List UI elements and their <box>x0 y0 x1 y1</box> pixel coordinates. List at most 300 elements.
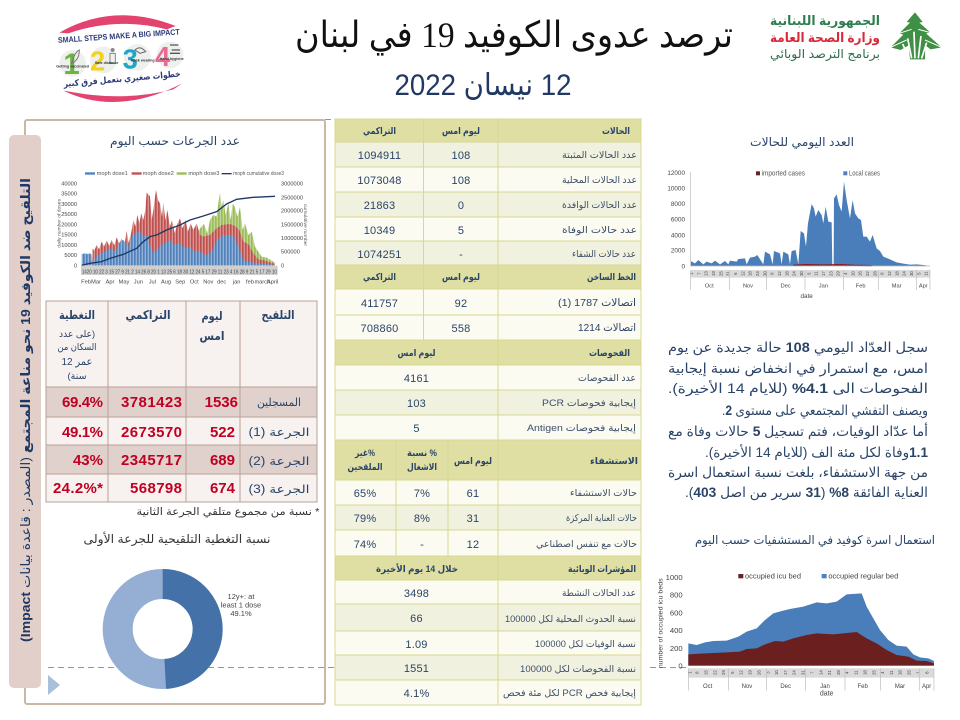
table header: سنة) <box>68 371 87 382</box>
title: ترصد عدوى الكوفيد 19 في لبنان <box>295 15 733 56</box>
table header <box>58 308 294 382</box>
heading: first dose coverage: نسبة التغطية التلقيحية للجرعة الأولى <box>84 531 270 547</box>
section: epidemiological indicators: نسبة الحدوث المحلية لكل 100000 <box>505 614 636 625</box>
text block: daily summary: سجل العدّاد اليومي 108 حالة جديدة عن يوم <box>668 340 928 356</box>
section: hotline <box>361 272 636 335</box>
table header: عمر 12 <box>62 356 92 368</box>
month labels: march <box>254 280 270 286</box>
date tick labels: 24 <box>792 670 797 675</box>
decorative triangle marker <box>48 675 60 695</box>
section: hospitalisation: 79% <box>354 513 376 525</box>
section: hospitalisation: الاشغال <box>407 462 437 473</box>
date tick labels: 24 <box>755 271 760 276</box>
section: cases: ليوم امس <box>442 126 480 137</box>
right axis labels: 3000000 <box>281 182 303 188</box>
ministry name text: الجمهورية اللبنانية <box>770 13 880 28</box>
date tick labels: 18 <box>862 670 867 675</box>
axis titles <box>57 198 308 248</box>
section: hospitalisation: ليوم امس <box>454 456 492 467</box>
section: hospitalisation: 74% <box>354 539 376 551</box>
section: hospitalisation <box>348 448 638 551</box>
row: dose 3: 674 <box>210 480 236 497</box>
month labels: Mar <box>892 284 902 290</box>
section: epidemiological indicators: نسبة الوفيات لكل 100000 <box>535 639 636 650</box>
legend: occupied regular bed <box>828 572 898 581</box>
dashed line inside panel <box>48 666 325 668</box>
date tick labels: 10 <box>774 670 779 675</box>
date tick labels: 5 <box>806 272 811 275</box>
month labels: Nov <box>743 284 753 290</box>
section: hospitalisation: 65% <box>354 488 376 500</box>
right axis labels: 0 <box>281 263 284 269</box>
section: cases: 108 <box>452 150 470 162</box>
date tick labels: 1420 10 22 3 15 27 9 21 2 14 26 8 20 1 13 25 6 18 30 12 24 5 17 29 11 23 4 16 28 9 21 5 17 29 10 <box>82 270 277 276</box>
chart legend: moph dose3 <box>188 171 219 177</box>
date tick labels: 11 <box>854 670 859 675</box>
section: tests: إيجابية فحوصات PCR <box>542 398 636 409</box>
date tick labels: 6 <box>733 272 738 275</box>
logo: small steps make a big impact: 2 <box>90 46 105 77</box>
date tick labels: 18 <box>898 670 903 675</box>
date tick labels: 12 <box>740 271 745 276</box>
section: hospitalisation: 31 <box>467 513 479 525</box>
axis titles: daily number of doses <box>57 198 63 248</box>
section: epidemiological indicators: المؤشرات الوبائية <box>568 564 636 575</box>
date band <box>81 266 278 275</box>
icu bed area <box>688 632 934 666</box>
text block: daily summary: الفحوصات الى 4.1% (للايام 14 الأخيرة). <box>668 380 928 397</box>
logo: small steps make a big impact: 1 <box>63 48 80 81</box>
month labels: Feb <box>857 684 868 690</box>
date tick labels: 15 <box>703 670 708 675</box>
chart: hospital beds <box>658 572 934 698</box>
logo: small steps make a big impact: 3 <box>123 43 138 74</box>
month labels <box>703 684 931 698</box>
date tick labels: 25 <box>871 670 876 675</box>
row: dose 3: 568798 <box>130 480 182 497</box>
month labels: jan <box>232 280 240 286</box>
section: hospitalisation: الاستشفاء <box>590 456 638 467</box>
date tick labels: 7 <box>809 671 814 674</box>
month labels: Aug <box>161 280 171 286</box>
date tick labels <box>689 271 929 276</box>
date tick labels: 19 <box>711 271 716 276</box>
row: registered: المسجلين <box>257 397 301 409</box>
date tick labels: 11 <box>814 271 819 276</box>
y axis title: number of occupied icu beds <box>658 578 665 668</box>
month labels: Apr <box>919 284 928 290</box>
legend: Local cases <box>849 170 880 177</box>
date tick labels: 4 <box>880 671 885 674</box>
section: cases: التراكمي <box>363 126 396 137</box>
date tick labels: 11 <box>889 670 894 675</box>
date tick labels: 31 <box>726 271 731 276</box>
donut chart: first dose coverage <box>118 569 261 689</box>
date tick labels: 6 <box>880 272 885 275</box>
date tick labels: 30 <box>762 271 767 276</box>
footnote: * نسبة من مجموع متلقي الجرعة الثانية <box>136 506 320 518</box>
text block: daily summary: أما عدّاد الوفيات، فتم تسجيل 5 حالات وفاة مع <box>668 422 928 440</box>
section: hotline: اتصالات 1787 (1) <box>558 297 636 309</box>
legend <box>756 170 880 177</box>
row: dose 2: 43% <box>73 452 103 469</box>
section: tests: 5 <box>413 423 420 435</box>
month labels: Jan <box>819 284 828 290</box>
y axis labels: 4000 <box>671 232 685 239</box>
month labels: Sep <box>175 280 185 286</box>
row: dose 1: 2673570 <box>121 424 182 441</box>
month labels: Nov <box>742 684 752 690</box>
month labels <box>81 280 278 286</box>
row: dose 3: الجرعة (3) <box>248 484 310 497</box>
text block: daily summary: 1.1وفاة لكل مئة الف (للايام 14 الأخيرة). <box>705 444 928 461</box>
text block: daily summary: من جهة الاستشفاء، بلغت نسبة استعمال اسرة <box>668 465 928 481</box>
table header: التراكمي <box>126 308 170 322</box>
row: dose 2 <box>73 452 310 469</box>
y axis labels: 0 <box>681 263 685 270</box>
right axis labels: 2500000 <box>281 195 303 201</box>
logo: small steps make a big impact <box>55 15 184 102</box>
date tick labels: 17 <box>821 271 826 276</box>
icon: cedar tree <box>891 12 942 59</box>
month labels: Dec <box>781 284 791 290</box>
date tick labels: 18 <box>894 271 899 276</box>
month labels: date <box>820 691 834 698</box>
logo: small steps make a big impact: Safe distance <box>95 61 118 65</box>
month labels: dec <box>217 280 226 286</box>
legend: imported cases <box>762 170 805 177</box>
dose 2 area <box>92 190 275 265</box>
imported cases area <box>793 263 872 268</box>
section: hospitalisation: - <box>420 539 424 551</box>
table: cases, tests, hospitalisation <box>335 119 641 705</box>
date tick labels: 1 <box>915 671 920 674</box>
date tick labels: 18 <box>784 271 789 276</box>
date tick labels: 30 <box>799 271 804 276</box>
date tick labels: 12 <box>777 271 782 276</box>
month labels: Apr <box>106 280 115 286</box>
section: hospitalisation: الملقحين <box>348 462 382 473</box>
row: dose 1: الجرعة (1) <box>248 427 310 440</box>
right axis labels: 2000000 <box>281 209 303 215</box>
axis baseline <box>691 172 930 266</box>
left axis labels: 15000 <box>61 233 77 239</box>
month labels: date <box>800 293 813 300</box>
date tick labels: 23 <box>828 271 833 276</box>
row: dose 1: 49.1% <box>62 424 103 441</box>
section: cases: 1073048 <box>357 175 402 187</box>
date tick labels: 7 <box>696 272 701 275</box>
y axis labels: 400 <box>670 626 683 635</box>
y axis labels: 12000 <box>667 170 685 177</box>
month labels: Jul <box>149 280 156 286</box>
date tick labels: 22 <box>712 670 717 675</box>
axis titles: cumulative number <box>302 204 308 246</box>
section: tests: عدد الفحوصات <box>578 373 636 384</box>
date tick labels: 29 <box>721 670 726 675</box>
month labels: Apr <box>922 684 931 690</box>
section: hospitalisation: 12 <box>467 539 479 551</box>
date tick labels: 12 <box>887 271 892 276</box>
table header: التغطية <box>59 308 95 322</box>
date tick labels: 18 <box>748 271 753 276</box>
local cases area <box>691 182 930 266</box>
row: dose 2: 689 <box>210 452 235 469</box>
section: epidemiological indicators: 1551 <box>404 663 429 675</box>
ministry name text <box>770 13 880 62</box>
section: hotline: 411757 <box>361 298 398 310</box>
legend: occupied icu bed <box>745 572 801 581</box>
section: hotline: الخط الساخن <box>587 272 636 283</box>
date tick labels: 24 <box>902 271 907 276</box>
section: cases: عدد الحالات الوافدة <box>562 200 637 211</box>
donut label: least 1 dose <box>221 600 261 610</box>
section: hotline: 708860 <box>361 323 398 335</box>
date tick labels: 28 <box>872 271 877 276</box>
date band <box>688 668 934 678</box>
regular bed area <box>688 593 934 666</box>
section: tests: ليوم امس <box>398 348 436 359</box>
date tick labels: 25 <box>907 670 912 675</box>
section: hospitalisation: حالات العناية المركزة <box>566 513 637 524</box>
month labels: Mar <box>895 684 905 690</box>
section: tests: 4161 <box>404 373 429 385</box>
chart: daily cases <box>667 170 930 300</box>
section: epidemiological indicators: 66 <box>410 613 423 625</box>
date tick labels: 5 <box>916 272 921 275</box>
heading: hospital bed use: استعمال اسرة كوفيد في المستشفيات حسب اليوم <box>695 533 935 548</box>
table header: السكان من <box>58 342 96 353</box>
table header: (على عدد <box>59 329 95 340</box>
logo: small steps make a big impact: خطوات صغيري بتعمل فرق كبير <box>62 69 181 90</box>
cumulative line <box>82 196 275 265</box>
date tick labels: 11 <box>924 271 929 276</box>
table: vaccination <box>46 301 317 502</box>
date tick labels: 8 <box>695 671 700 674</box>
chart legend <box>85 171 284 177</box>
row: dose 1: 522 <box>210 424 235 441</box>
heading: doses per day: عدد الجرعات حسب اليوم <box>110 134 240 149</box>
text block: daily summary: العناية الفائقة 8% (31 سرير من اصل 403). <box>685 485 928 501</box>
section: tests <box>398 348 636 435</box>
month labels: April <box>267 280 278 286</box>
text block: daily summary <box>668 340 928 501</box>
section rows background <box>335 119 641 705</box>
logo: small steps make a big impact: SMALL STEPS MAKE A BIG IMPACT <box>58 27 180 45</box>
section: cases: 10349 <box>364 225 395 237</box>
month labels: May <box>119 280 130 286</box>
section: hospitalisation: حالات الاستشفاء <box>570 488 637 499</box>
logo: small steps make a big impact: Mask wearing <box>131 59 155 63</box>
right axis labels <box>281 182 303 269</box>
section: cases: عدد الحالات المحلية <box>562 175 637 186</box>
date tick labels: 25 <box>718 271 723 276</box>
left axis labels: 35000 <box>61 192 77 198</box>
row: dose 3: 24.2%* <box>53 480 103 497</box>
section: cases: 108 <box>452 175 470 187</box>
logo: small steps make a big impact: Getting vaccinated <box>56 65 89 69</box>
donut label: 49.1% <box>230 609 252 618</box>
y axis labels: 6000 <box>671 217 685 224</box>
section: epidemiological indicators <box>376 563 636 700</box>
date tick labels: 12 <box>739 670 744 675</box>
section: hotline: اتصالات 1214 <box>578 322 636 334</box>
y axis labels: 800 <box>670 591 683 600</box>
section: epidemiological indicators: خلال 14 يوم الأخيرة <box>376 563 458 575</box>
row: dose 2: الجرعة (2) <box>248 456 310 469</box>
date tick labels: 30 <box>909 271 914 276</box>
section: epidemiological indicators: عدد الحالات النشطة <box>562 588 636 599</box>
y axis labels <box>667 170 685 270</box>
dashed guide lines <box>48 120 688 668</box>
date subtitle: 12 نيسان 2022 <box>394 69 572 102</box>
left axis labels <box>61 181 77 269</box>
right axis labels: 1000000 <box>281 236 303 242</box>
date tick labels <box>687 670 929 675</box>
table header: التلقيح <box>262 308 294 322</box>
month labels <box>705 284 928 300</box>
table header: ليوم <box>202 309 222 324</box>
date tick labels: 13 <box>704 271 709 276</box>
logo: ministry of public health <box>770 12 942 62</box>
y axis labels: 1000 <box>666 573 683 582</box>
right axis labels: 1500000 <box>281 222 303 228</box>
section: hospitalisation: % نسبة <box>407 448 437 459</box>
side tab with vertical title: التلقيح ضد الكوفيد 19 نحو مناعة المجتمع (المصدر : قاعدة بيانات Impact) <box>18 178 34 642</box>
date tick labels: 31 <box>801 670 806 675</box>
section: cases: - <box>459 249 463 261</box>
section: hospitalisation: 8% <box>414 513 430 525</box>
month labels: Feb <box>856 284 866 290</box>
row: registered: 3781423 <box>121 394 182 411</box>
chart legend: moph cumulative dose3 <box>233 171 284 177</box>
date tick labels: 26 <box>756 670 761 675</box>
section: epidemiological indicators: 3498 <box>404 588 429 600</box>
date tick labels: 10 <box>850 271 855 276</box>
section: cases: 0 <box>458 200 464 212</box>
section: epidemiological indicators: نسبة الفحوصات لكل 100000 <box>520 664 636 675</box>
donut label <box>221 592 261 618</box>
left axis labels: 20000 <box>61 222 77 228</box>
section: hospitalisation: %غير <box>354 448 375 459</box>
left axis labels: 25000 <box>61 212 77 218</box>
section: cases: 5 <box>458 225 464 237</box>
section: cases: عدد الحالات المثبتة <box>562 150 637 161</box>
section: hospitalisation: 7% <box>414 488 430 500</box>
section: hospitalisation: حالات مع تنفس اصطناعي <box>536 539 637 550</box>
dose 3 area <box>197 193 275 265</box>
left axis labels: 5000 <box>64 253 77 259</box>
heading: daily cases: العدد اليومي للحالات <box>750 135 854 150</box>
section: cases <box>357 126 637 261</box>
logo: small steps make a big impact: Hand hygiene <box>160 57 184 61</box>
row: registered: 69.4% <box>62 394 103 411</box>
date tick labels: 5 <box>730 671 735 674</box>
date tick labels: 29 <box>836 271 841 276</box>
date tick labels: 4 <box>843 272 848 275</box>
date tick labels: 8 <box>924 671 929 674</box>
y axis labels: 10000 <box>667 186 685 193</box>
date tick labels: 19 <box>748 670 753 675</box>
date tick labels: 1 <box>689 272 694 275</box>
row: dose 1 <box>62 424 310 441</box>
legend <box>738 572 898 581</box>
section: cases: 1074251 <box>357 249 402 261</box>
logo: small steps make a big impact: 4 <box>155 41 171 72</box>
section: hospitalisation: 61 <box>467 488 479 500</box>
section: epidemiological indicators: إيجابية فحص PCR لكل مئة فحص <box>503 688 636 699</box>
y axis labels: 200 <box>670 644 683 653</box>
month labels: Mar <box>91 280 101 286</box>
date tick labels: 3 <box>765 671 770 674</box>
section: cases: 1094911 <box>358 150 401 162</box>
row: dose 3 <box>53 480 310 497</box>
dose 1 area <box>82 232 275 265</box>
date tick labels: 22 <box>865 271 870 276</box>
chart: daily vaccine doses <box>57 171 308 286</box>
date tick labels: 16 <box>858 271 863 276</box>
section: hotline: ليوم امس <box>442 272 480 283</box>
date tick labels: 14 <box>818 670 823 675</box>
y axis labels: 600 <box>670 608 683 617</box>
left axis labels: 30000 <box>61 202 77 208</box>
left axis labels: 10000 <box>61 243 77 249</box>
y axis labels: 2000 <box>671 248 685 255</box>
bar gaps overlay <box>82 102 275 347</box>
left axis labels: 0 <box>74 263 77 269</box>
section: hotline: 92 <box>455 298 467 310</box>
section: cases: الحالات <box>602 126 630 137</box>
date tick labels: 1 <box>687 671 692 674</box>
section: hotline: التراكمي <box>363 272 396 283</box>
section: tests: 103 <box>407 398 426 410</box>
month labels: Jan <box>820 684 830 690</box>
month labels: Feb <box>81 280 91 286</box>
month labels: feb <box>246 280 254 286</box>
month separators <box>691 270 930 290</box>
section: tests: إيجابية فحوصات Antigen <box>527 423 636 434</box>
side tab with vertical title <box>9 135 41 688</box>
row: registered: 1536 <box>205 394 238 411</box>
month separators <box>688 668 934 691</box>
chart legend: moph dose2 <box>143 171 174 177</box>
y axis labels: 0 <box>678 662 683 671</box>
month labels: Dec <box>780 684 791 690</box>
row: dose 2: 2345717 <box>121 452 182 469</box>
ministry name text: برنامج الترصد الوبائي <box>770 47 880 62</box>
date tick labels: 4 <box>845 671 850 674</box>
date band <box>691 270 930 278</box>
y axis labels: 8000 <box>671 201 685 208</box>
section: epidemiological indicators: 1.09 <box>405 639 428 651</box>
panel: vaccination <box>9 120 325 704</box>
panel frame <box>25 120 325 704</box>
section: cases: 21863 <box>364 200 395 212</box>
y axis labels <box>666 573 683 671</box>
donut label: 12y+: at <box>228 592 255 601</box>
left axis labels: 40000 <box>61 181 77 187</box>
section: epidemiological indicators: 4.1% <box>404 688 429 700</box>
table header: امس <box>200 329 224 343</box>
ministry name text: وزارة الصحة العامة <box>770 30 880 45</box>
month labels: Jun <box>134 280 143 286</box>
section: hotline: 558 <box>452 323 470 335</box>
row: registered <box>62 394 301 411</box>
date tick labels: 21 <box>827 670 832 675</box>
date tick labels: 6 <box>770 272 775 275</box>
text block: daily summary: ويصنف التفشي المجتمعي على مستوى 2. <box>722 403 928 419</box>
section: cases: عدد حالات الشفاء <box>572 249 636 260</box>
